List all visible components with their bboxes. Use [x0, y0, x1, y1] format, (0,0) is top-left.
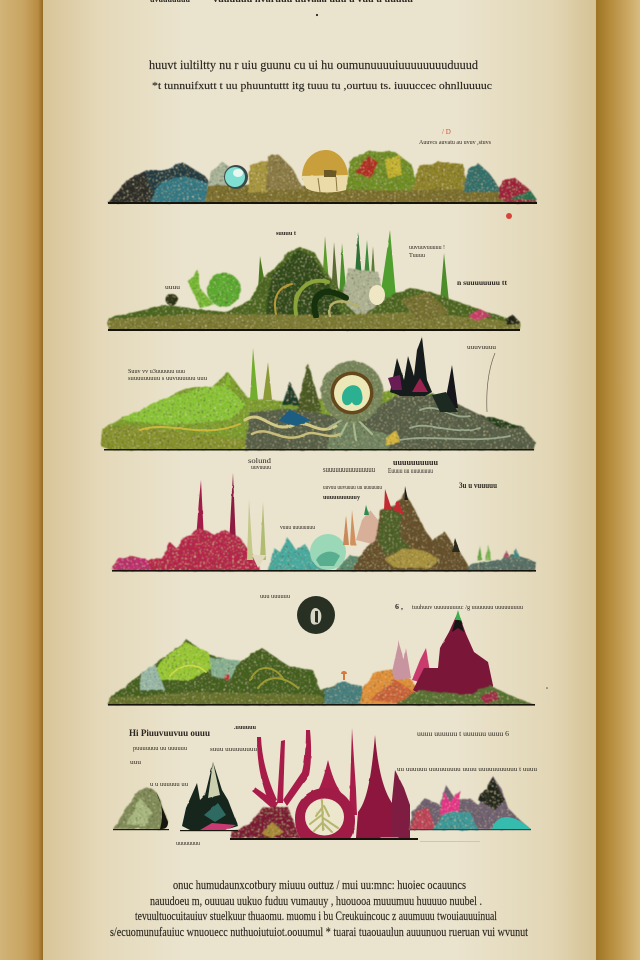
olive peak shadow	[156, 792, 168, 829]
ridge body	[101, 372, 536, 450]
landscape 2: green hill and spires	[108, 230, 520, 331]
low right reef	[468, 544, 536, 571]
brown mountain	[352, 493, 472, 571]
labels for landscape 4: solund	[248, 457, 272, 465]
black spires	[388, 337, 458, 412]
landscape 6: separated peaks and crimson arch	[113, 728, 531, 842]
labels for landscape 6: uuu	[130, 760, 141, 766]
base lines	[113, 829, 531, 842]
pale pod	[369, 285, 385, 305]
tendrils	[140, 408, 510, 440]
background: right gold band	[596, 0, 640, 960]
coral branches	[343, 505, 378, 545]
red flags	[384, 486, 460, 552]
labels for landscape 2	[165, 231, 508, 291]
intro text: huuvt iultiltty nu r uiu guunu cu ui hu oumunuuuuiuuuuuuuuduuud	[149, 57, 478, 72]
curling roots	[275, 281, 358, 316]
labels for landscape 2: Tuuuu	[409, 253, 425, 259]
green right slope	[395, 685, 535, 705]
pale glass sphere	[310, 534, 346, 570]
glowing orb	[321, 361, 383, 423]
spires	[258, 230, 449, 305]
crimson peak	[413, 610, 494, 702]
pale stalks	[247, 499, 266, 568]
labels for landscape 3	[128, 345, 496, 382]
teal spires	[268, 538, 385, 571]
bottom paragraph: tevuultuocuitauiuv stuelkuur thuaomu. muomu i bu Creukuincouc z auumuuu twouiauuuinual	[135, 908, 497, 923]
labels for landscape 4: vuuu uuuuuuuu	[280, 525, 315, 531]
labels for landscape 1: / D	[442, 128, 451, 136]
arch window	[305, 798, 344, 836]
labels for landscape 2: uuvuuvuuuuu !	[409, 245, 445, 251]
arch ring with window	[295, 788, 355, 840]
landscape 1: teal, dome and olive ridge	[108, 150, 537, 204]
labels for landscape 6: uu uuuuuu uuuuuuuuu uuuu uuuuuuuuuuu t uuuu	[397, 767, 537, 773]
dark trees	[282, 363, 322, 412]
coral plant inside arch	[310, 800, 338, 832]
labels for landscape 4: 6 ,	[395, 603, 403, 611]
leafy tree	[166, 270, 241, 308]
orange mound	[360, 669, 425, 705]
base line	[108, 202, 537, 204]
landscape 4: crimson towers and brown mountain	[112, 473, 536, 572]
tiny mushroom	[341, 671, 347, 680]
crimson towers	[196, 473, 236, 545]
background: left gold band	[0, 0, 43, 960]
labels for landscape 1	[419, 128, 492, 146]
labels for landscape 6	[129, 725, 537, 847]
labels for landscape 3: suuuuuuuuu s uuvuuuuuu uuu	[128, 376, 207, 382]
labels for landscape 3: uuuvuuuu	[467, 345, 496, 351]
labels for landscape 6: uuuu uuuuuu t uuuuuu uuuu 6	[417, 730, 510, 738]
labels for landscape 4: suuuuuuuuuuuuuuu	[323, 465, 375, 474]
labels for landscape 4: uuvuu uuvuuuu uu uuuuuuu	[323, 485, 382, 491]
labels for landscape 4	[248, 457, 523, 611]
labels for landscape 4: uuvuuuu	[251, 465, 271, 471]
title fragment cut at top	[150, 0, 414, 16]
labels for landscape 4: 3u u vuuuuu	[459, 481, 497, 490]
base line	[112, 570, 536, 572]
labels for landscape 4: uuuuuuuuuu	[393, 458, 439, 467]
bottom paragraph: onuc humudaunxcotbury miuuu outtuz / mui uu:mnc: huoiec ocauuncs	[173, 877, 466, 892]
labels for landscape 2: uuuu	[165, 285, 180, 291]
dark peak	[182, 762, 238, 831]
ridge body	[108, 151, 537, 203]
green hills	[108, 640, 365, 705]
main ridge	[108, 247, 520, 330]
crystal sphere	[224, 165, 248, 189]
base line	[108, 704, 535, 706]
pink spikes	[392, 640, 430, 685]
labels for landscape 2: n suuuuuuuu tt	[457, 279, 508, 287]
base line	[104, 449, 534, 450]
labels for landscape 6: puuuuuuu uu uuuuuu	[133, 746, 187, 752]
labels for landscape 6: uuuuuuuu	[176, 841, 200, 847]
labels for landscape 3: Suuv vv u3uuuuuu uuu	[128, 369, 185, 375]
small dot	[546, 687, 548, 689]
labels for landscape 6: u u uuuuuu uu	[150, 782, 188, 788]
red seal mark	[506, 213, 512, 219]
labels for landscape 6: .uuuuuu	[234, 725, 257, 731]
bottom paragraph: s/ecuomunufauiuc wnuouecc nuthuoiutuiot.oouumul * tuarai tuaouaulun auuunuou rueruan vui wvunut	[110, 924, 528, 939]
multicolor range	[409, 776, 530, 830]
labels for landscape 6: suuu uuuuuuuuu	[210, 747, 257, 753]
labels for landscape 2: suuuu t	[276, 231, 296, 237]
olive triangle peak	[113, 788, 168, 829]
landscape 3: green moss, orb and black spires	[101, 337, 536, 450]
green stalks	[225, 348, 272, 400]
crimson left mound	[230, 807, 300, 838]
bottom paragraph	[110, 877, 528, 939]
dark medallion	[297, 596, 335, 634]
teal whale-shaped rock	[492, 817, 531, 829]
labels for landscape 1: Auuvcs auvatu au uvuv ,stuvs	[419, 140, 492, 146]
crimson mound	[112, 528, 260, 571]
labels for landscape 6: Hi Piuuvuuvuu ouuu	[129, 728, 210, 738]
labels for landscape 4: uuuuuuuuuuy	[323, 495, 360, 501]
annotation arrow line	[487, 353, 495, 412]
intro text: *t tunnuifxutt t uu phuuntuttt itg tuuu tu ,ourtuu ts. iuuuccec ohnlluuuuc	[152, 80, 492, 92]
golden dome	[301, 150, 348, 192]
intro text	[149, 57, 492, 92]
labels for landscape 4: Euuuu uu uuuuuuuu	[388, 467, 433, 475]
labels for landscape 4: tuuhuuv uuuuuuuuu: /g uuuuuuu uuuuuuuuu	[412, 605, 523, 611]
bottom paragraph: nauudoeu m, ouuuau uukuo fuduu vumauuy , huouooa muuumuu huuuuo nuubel .	[150, 893, 482, 908]
crimson spires and arch	[230, 728, 410, 840]
hill tendrils	[170, 666, 298, 688]
base line	[108, 329, 520, 331]
landscape 5: green hills, orange mound and crimson peak	[108, 610, 535, 706]
labels for landscape 4: uuu uuuuuu	[260, 594, 290, 600]
